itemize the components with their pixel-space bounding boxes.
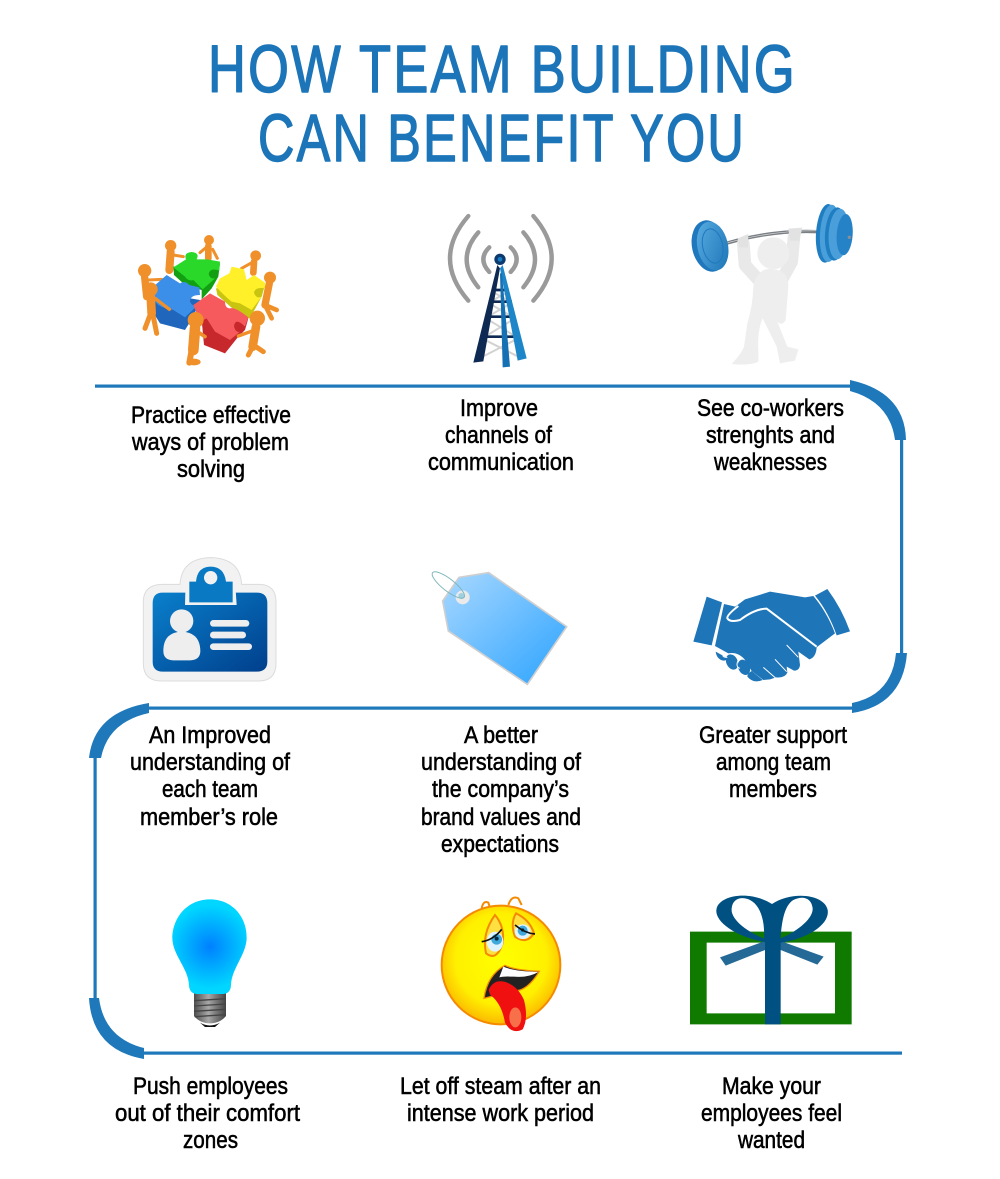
icon: light bulb xyxy=(172,899,247,1027)
caption: brand values: the company’s xyxy=(432,776,569,803)
caption: team member roles: An Improved xyxy=(149,722,271,749)
title: CAN BENEFIT YOU xyxy=(258,101,746,176)
caption: feel wanted: employees feel xyxy=(701,1100,842,1127)
caption: greater support xyxy=(699,722,847,803)
caption: brand values: understanding of xyxy=(421,749,581,776)
caption: comfort zones: Push employees xyxy=(133,1073,288,1100)
caption: strengths: weaknesses xyxy=(713,449,827,476)
icon: handshake xyxy=(693,589,850,681)
caption: problem solving xyxy=(131,402,291,483)
icon: team solving puzzle xyxy=(138,235,277,365)
caption: comfort zones xyxy=(115,1073,300,1154)
caption: team member roles xyxy=(130,722,290,831)
icon: weightlifter xyxy=(687,203,854,365)
icon: gift box xyxy=(690,896,852,1024)
caption: strengths: See co-workers xyxy=(697,395,844,422)
caption: greater support: among team xyxy=(716,749,831,776)
caption: let off steam: Let off steam after an xyxy=(400,1073,601,1100)
caption: communication: Improve xyxy=(460,395,538,422)
title xyxy=(208,32,797,176)
caption: let off steam: intense work period xyxy=(407,1100,594,1127)
caption: brand values: brand values and xyxy=(421,804,581,831)
icon: price tag xyxy=(429,568,567,684)
caption: let off steam xyxy=(400,1073,601,1127)
caption: feel wanted xyxy=(701,1073,842,1154)
caption: strengths xyxy=(697,395,844,476)
caption: communication: communication xyxy=(428,449,574,476)
caption: brand values: A better xyxy=(464,722,538,749)
caption: problem solving: Practice effective xyxy=(131,402,291,429)
icon: communication tower xyxy=(450,216,552,367)
caption: greater support: Greater support xyxy=(699,722,847,749)
winding connector line xyxy=(89,380,907,1059)
caption: problem solving: solving xyxy=(177,456,245,483)
caption: communication xyxy=(428,395,574,476)
caption: feel wanted: wanted xyxy=(737,1127,805,1154)
caption: communication: channels of xyxy=(445,422,552,449)
caption: problem solving: ways of problem xyxy=(131,429,289,456)
caption: team member roles: each team xyxy=(162,776,258,803)
caption: team member roles: member’s role xyxy=(140,804,278,831)
caption: brand values: expectations xyxy=(441,831,559,858)
caption: feel wanted: Make your xyxy=(722,1073,821,1100)
caption: team member roles: understanding of xyxy=(130,749,290,776)
caption: comfort zones: zones xyxy=(183,1127,238,1154)
caption: brand values xyxy=(421,722,581,858)
title: HOW TEAM BUILDING xyxy=(208,32,797,107)
caption: greater support: members xyxy=(729,776,817,803)
caption: comfort zones: out of their comfort xyxy=(115,1100,300,1127)
icon: id badge xyxy=(143,558,276,681)
icon: exhausted smiley xyxy=(442,897,560,1031)
caption: strengths: strenghts and xyxy=(706,422,835,449)
